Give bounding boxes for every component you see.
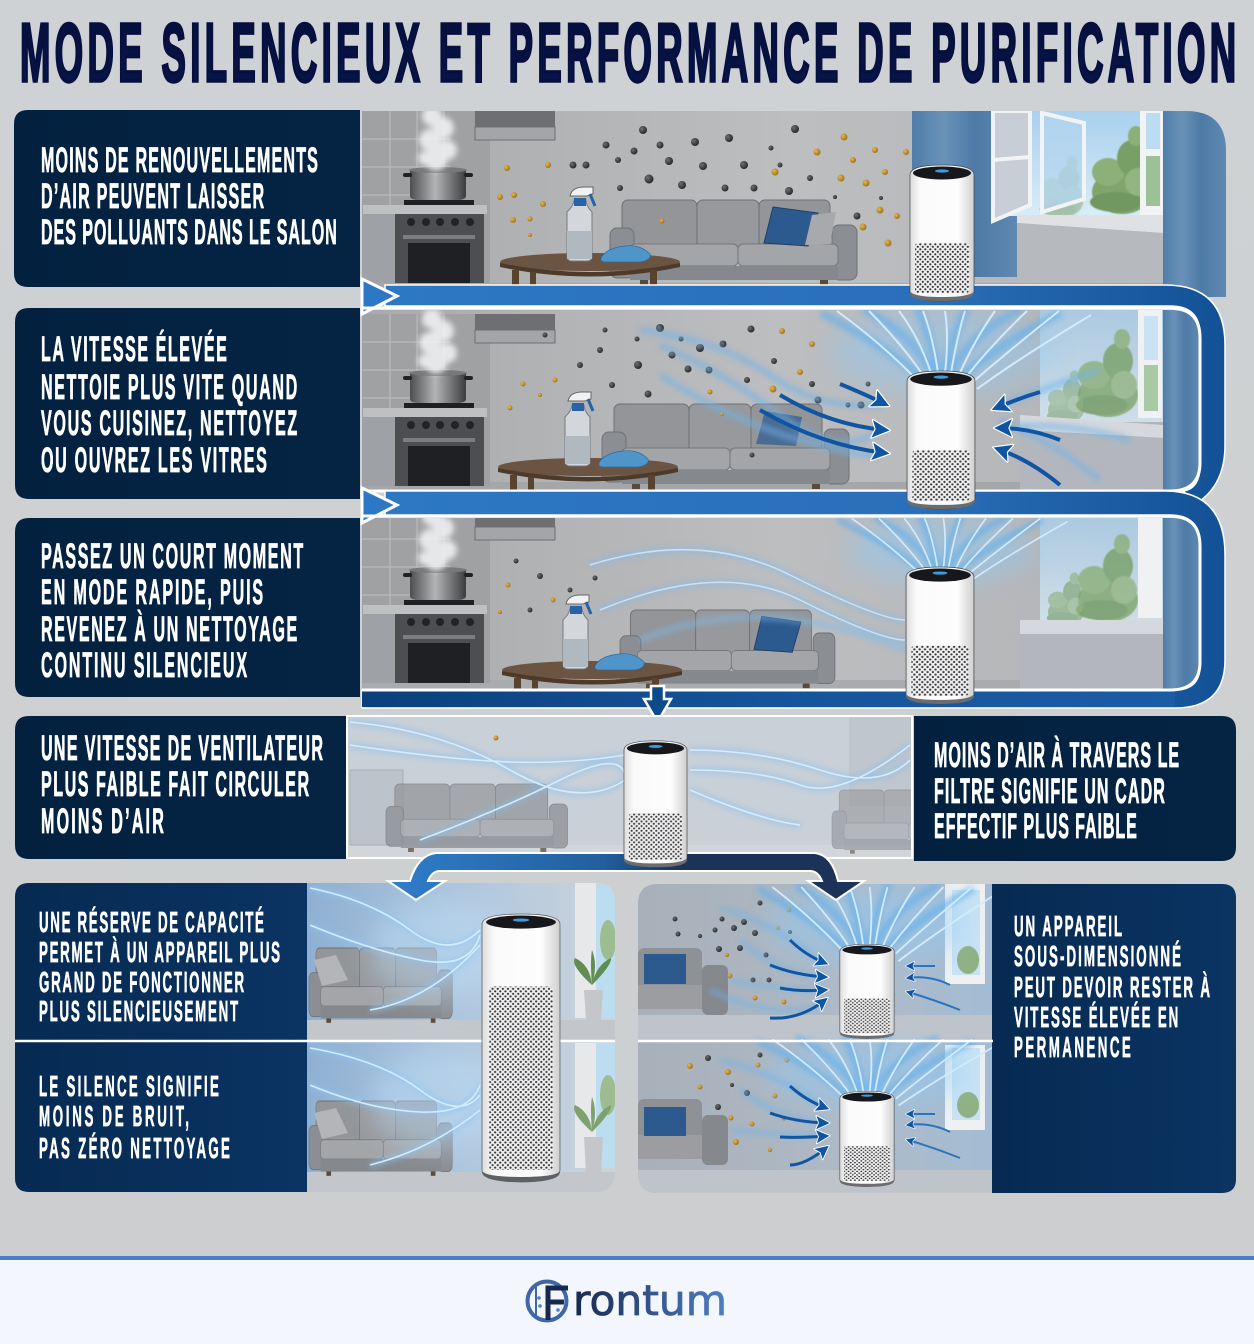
panel: row 2 text: VOUS CUISINEZ, NETTOYEZ (41, 403, 297, 443)
dividers between bottom scenes (15, 1040, 993, 1042)
large purifier (482, 914, 560, 1182)
panel: row 4 left text (15, 716, 346, 859)
logo icon (528, 1282, 568, 1320)
frame: row 4 scene outline (347, 716, 912, 858)
sofas (309, 948, 452, 1176)
panel: row 2 text: LA VITESSE ÉLEVÉE (41, 329, 227, 369)
panel: bottom left text: MOINS DE BRUIT, (39, 1100, 189, 1132)
window (575, 883, 616, 1168)
panel: row 4 right text (914, 716, 1236, 861)
panel: bottom left text: GRAND DE FONCTIONNER (39, 966, 244, 998)
purifier: row 3 (906, 567, 974, 704)
panel: bottom left text: LE SILENCE SIGNIFIE (39, 1070, 219, 1102)
faded sofa (386, 784, 568, 852)
panel: row 1 text: MOINS DE RENOUVELLEMENTS (41, 140, 318, 180)
arrow: down to row 4 (644, 686, 671, 722)
airflow fan above purifier (821, 307, 1091, 393)
panel: row 4 left text: UNE VITESSE DE VENTILATEUR (41, 728, 323, 768)
open window with curtains (912, 111, 1226, 297)
flow band: row 2 to row 3 (362, 488, 1225, 708)
table with bottle and cloth (498, 392, 678, 491)
airflow arrows into purifier (640, 330, 1130, 485)
logo: Frontum (528, 1276, 727, 1325)
table with bottle and cloth (502, 595, 682, 694)
kitchen with steaming pot (362, 309, 555, 486)
airflow fan above purifier (838, 515, 1068, 584)
panel: bottom left text: PERMET À UN APPAREIL PLUS (39, 936, 280, 968)
sofa (610, 200, 857, 285)
flow band: row 1 to row 2 (362, 279, 1225, 503)
panel: row 4 right text: EFFECTIF PLUS FAIBLE (934, 806, 1137, 846)
purifier: row 4 (624, 741, 687, 867)
panel: row 3 text (15, 518, 360, 697)
panel: row 3 scene returning to quiet mode (362, 506, 1200, 694)
airflow lines (590, 550, 905, 650)
panel: row 4 right text: MOINS D’AIR À TRAVERS LE (934, 735, 1179, 775)
panel: row 2 text: NETTOIE PLUS VITE QUAND (41, 367, 297, 407)
frame: row 2 scene outline (362, 308, 1200, 491)
panel: row 4 scene with gentle airflow (348, 717, 911, 856)
sofas (638, 948, 728, 1165)
sofa (620, 610, 835, 688)
purifier: row 2 (907, 371, 975, 509)
kitchen with steaming pot (362, 506, 555, 683)
panel: row 4 left text: PLUS FAIBLE FAIT CIRCULER (41, 764, 309, 804)
window (1020, 310, 1200, 491)
windows (945, 884, 985, 1130)
pollutant particles (508, 324, 870, 458)
panel: bottom left scene with large purifier (307, 883, 616, 1192)
plants (574, 950, 611, 1173)
faded sofa right (832, 790, 911, 854)
sofa (602, 404, 849, 489)
pollutant particles (497, 125, 909, 246)
airflow arrows into purifiers (710, 908, 960, 1165)
airflow glow (310, 886, 484, 1170)
particle (494, 736, 498, 740)
panel: bottom right text (992, 884, 1236, 1193)
airflow fans (758, 883, 1001, 1109)
small purifier: upper (840, 944, 894, 1039)
panel: row 3 text: PASSEZ UN COURT MOMENT (41, 536, 303, 576)
window (1020, 518, 1200, 690)
panel: row 1 scene with pollutants (362, 106, 1226, 297)
airflow lines (350, 722, 910, 840)
panel: bottom left text: UNE RÉSERVE DE CAPACITÉ (39, 906, 264, 938)
footer band (0, 1256, 1254, 1344)
small purifier: lower (840, 1091, 894, 1187)
panel: row 3 text: REVENEZ À UN NETTOYAGE (41, 609, 297, 649)
panel: bottom right text: UN APPAREIL (1014, 910, 1122, 942)
particles (672, 900, 792, 1152)
panel: row 1 text: D’AIR PEUVENT LAISSER (41, 176, 264, 216)
remaining particles (498, 558, 598, 614)
panel: row 1 text: DES POLLUANTS DANS LE SALON (41, 212, 337, 252)
panel: row 2 scene at high speed (362, 307, 1200, 491)
panel: row 2 text (15, 308, 360, 499)
panel: bottom left text (15, 883, 307, 1192)
panel: bottom left text: PAS ZÉRO NETTOYAGE (39, 1132, 230, 1164)
panel: bottom right text: PERMANENCE (1014, 1031, 1131, 1063)
panel: row 3 text: EN MODE RAPIDE, PUIS (41, 572, 263, 612)
split arrows to bottom panels (388, 853, 864, 900)
panel: bottom right text: VITESSE ÉLEVÉE EN (1014, 1001, 1178, 1033)
table with bottle and cloth (500, 187, 680, 286)
panel: bottom right text: SOUS-DIMENSIONNÉ (1014, 940, 1181, 972)
panel: bottom left text: PLUS SILENCIEUSEMENT (39, 995, 238, 1027)
title: MODE SILENCIEUX ET PERFORMANCE DE PURIFICATION (20, 6, 1236, 99)
panel: row 4 right text: FILTRE SIGNIFIE UN CADR (934, 771, 1165, 811)
panel: bottom right scene with undersized purifier (638, 883, 1001, 1193)
purifier: row 1 (910, 165, 974, 301)
panel: row 4 left text: MOINS D’AIR (41, 801, 164, 841)
frame: row 3 scene outline (362, 516, 1200, 690)
kitchen with steaming pot (362, 106, 555, 283)
panel: row 2 text: OU OUVREZ LES VITRES (41, 440, 267, 480)
panel: row 3 text: CONTINU SILENCIEUX (41, 645, 247, 685)
logo wordmark: rontum (573, 1276, 727, 1325)
panel: bottom right text: PEUT DEVOIR RESTER À (1014, 971, 1210, 1003)
panel: row 1 text (14, 110, 360, 287)
